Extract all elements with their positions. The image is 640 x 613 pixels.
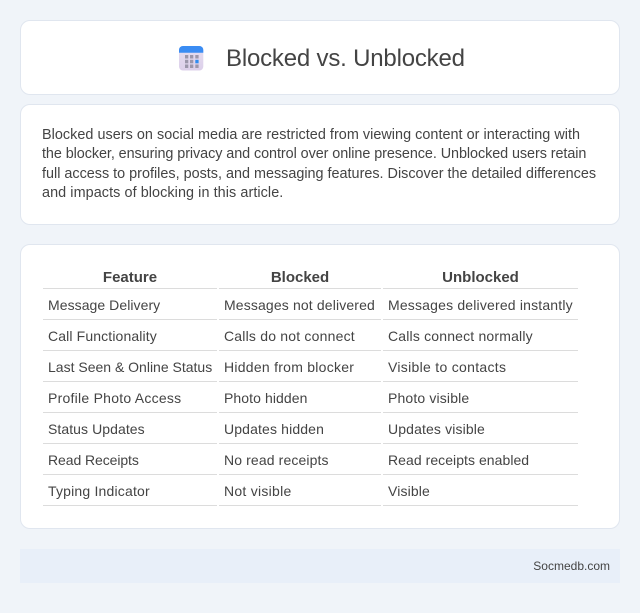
comparison table: Typing Indicator (48, 483, 150, 499)
comparison table: Visible (388, 483, 430, 499)
footer (20, 549, 620, 583)
comparison table: Not visible (224, 483, 292, 499)
comparison table: Hidden from blocker (224, 359, 354, 375)
comparison table: Messages delivered instantly (388, 297, 573, 313)
comparison table: Calls connect normally (388, 328, 533, 344)
comparison table: Updates visible (388, 421, 485, 437)
comparison table: Calls do not connect (224, 328, 355, 344)
comparison table: Photo visible (388, 390, 469, 406)
panel: intro card (20, 104, 620, 225)
intro text: the blocker, ensuring privacy and control over online presence. Unblocked users retain (42, 146, 586, 162)
comparison table: Call Functionality (48, 328, 157, 344)
comparison table: Read Receipts (48, 452, 139, 468)
icon: calendar (179, 46, 204, 70)
comparison table: Last Seen & Online Status (48, 359, 212, 375)
comparison table: Messages not delivered (224, 297, 375, 313)
footer credit: Socmedb.com (533, 559, 610, 573)
comparison table (43, 269, 578, 506)
panel: title card (20, 20, 620, 95)
comparison table: Profile Photo Access (48, 390, 181, 406)
comparison table: Feature (103, 269, 157, 286)
comparison table: Read receipts enabled (388, 452, 529, 468)
comparison table: No read receipts (224, 452, 329, 468)
intro text (42, 127, 596, 201)
comparison table: Message Delivery (48, 297, 160, 313)
intro text: Blocked users on social media are restricted from viewing content or interacting with (42, 127, 580, 143)
comparison table: Unblocked (442, 269, 519, 286)
intro text: and impacts of blocking in this article. (42, 185, 283, 201)
comparison table: Visible to contacts (388, 359, 506, 375)
comparison table: Photo hidden (224, 390, 307, 406)
title: Blocked vs. Unblocked (226, 45, 465, 72)
comparison table: Updates hidden (224, 421, 324, 437)
intro text: full access to profiles, posts, and messaging features. Discover the detailed differences (42, 166, 596, 182)
comparison table: Blocked (271, 269, 329, 286)
comparison table: Status Updates (48, 421, 145, 437)
panel: table card (20, 244, 620, 529)
